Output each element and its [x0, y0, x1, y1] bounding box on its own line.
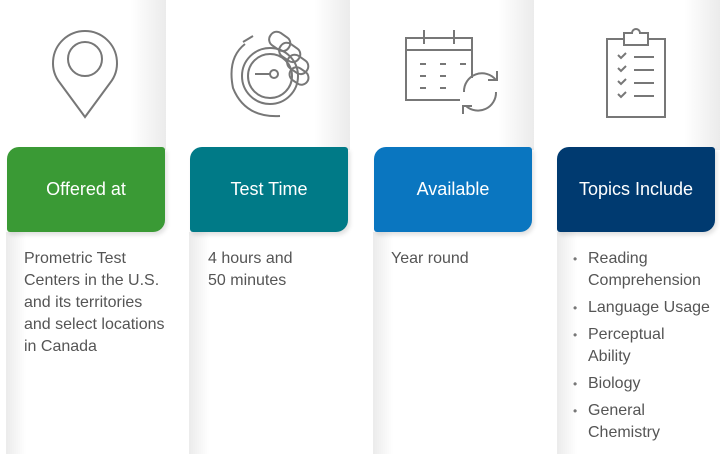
- list: topics: Ability: [588, 348, 631, 365]
- list: topics: Language Usage: [588, 299, 710, 316]
- text: available: Year round: [391, 250, 469, 267]
- banner: Available: Available: [417, 179, 489, 199]
- banner: Available: [374, 147, 532, 232]
- list: topics: Reading: [588, 250, 648, 267]
- icon: calendar refresh: [405, 30, 498, 114]
- text: test time: 4 hours and: [208, 250, 293, 267]
- text: offered at: [24, 250, 165, 355]
- banner: Test Time: Test Time: [230, 179, 308, 199]
- text: offered at: Centers in the U.S.: [24, 272, 159, 289]
- banner: Topics Include: [557, 147, 715, 232]
- banner: Topics Include: Topics Include: [579, 179, 693, 199]
- text: test time: [208, 250, 293, 289]
- icon: location pin: [52, 30, 118, 119]
- list: topics: Comprehension: [588, 272, 701, 289]
- icon: clipboard: [606, 28, 666, 118]
- banner: Offered at: Offered at: [46, 179, 126, 199]
- text: offered at: and its territories: [24, 294, 142, 311]
- list: topics: Perceptual: [588, 326, 664, 343]
- list: topics: [574, 250, 710, 441]
- banner: Offered at: [7, 147, 165, 232]
- list: topics: Biology: [588, 375, 640, 392]
- text: offered at: in Canada: [24, 338, 97, 355]
- text: offered at: Prometric Test: [24, 250, 126, 267]
- list: topics: General: [588, 402, 645, 419]
- text: offered at: and select locations: [24, 316, 165, 333]
- list: topics: Chemistry: [588, 424, 660, 441]
- icon: stopwatch hand: [230, 30, 310, 118]
- text: test time: 50 minutes: [208, 272, 286, 289]
- banner: Test Time: [190, 147, 348, 232]
